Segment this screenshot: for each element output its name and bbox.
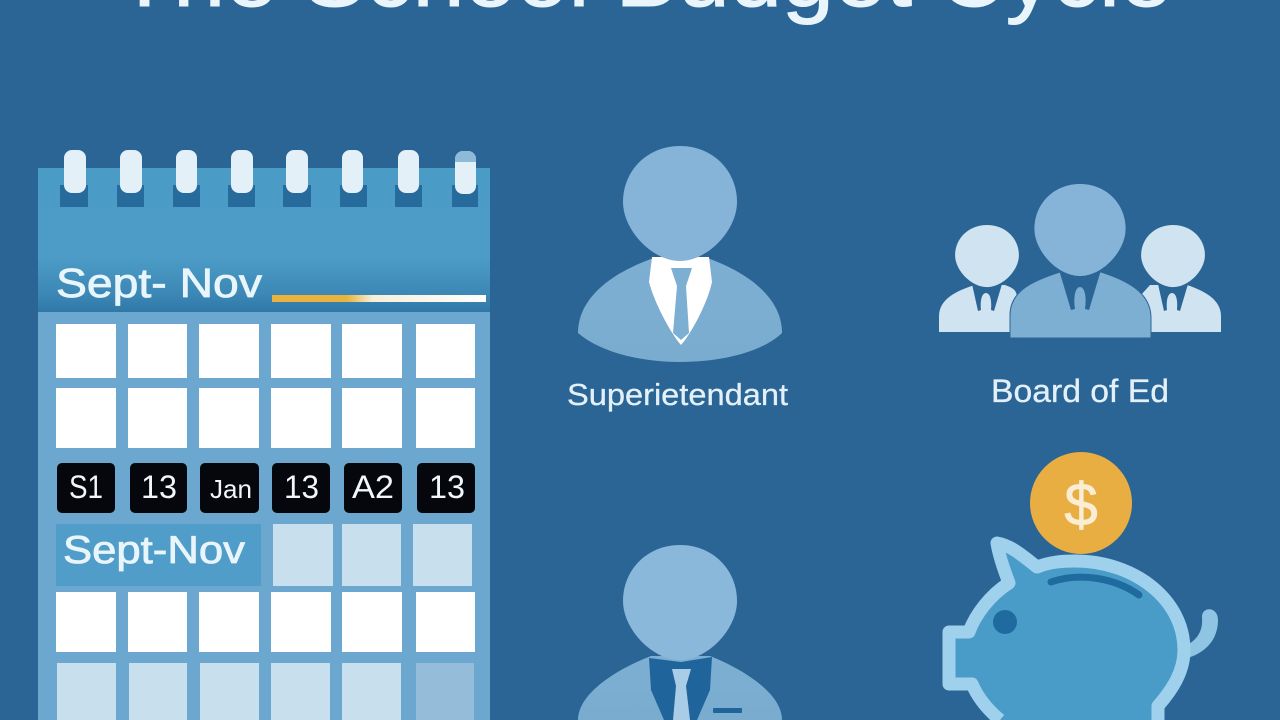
icon: second staff member xyxy=(578,545,782,720)
yellow progress rule xyxy=(272,295,486,302)
calendar body xyxy=(38,312,490,720)
highlighted period: Sept-Nov xyxy=(56,524,261,586)
icon: coin: $ xyxy=(1064,471,1098,538)
icon: piggy bank xyxy=(949,543,1218,720)
label: superintendant: Superietendant xyxy=(567,377,788,412)
pale date cells xyxy=(273,524,472,586)
black date chips: A2 xyxy=(352,469,394,505)
black date chips: S1 xyxy=(69,469,103,505)
highlighted period: Sept-Nov: Sept-Nov xyxy=(63,529,246,572)
black date chips: 13 xyxy=(429,469,465,505)
side member right xyxy=(1141,225,1221,332)
centre member xyxy=(1010,184,1151,338)
pig outline xyxy=(949,543,1184,720)
side member left xyxy=(939,225,1019,332)
pig body fill xyxy=(949,543,1184,720)
black date chips xyxy=(57,463,475,513)
tail xyxy=(1180,609,1218,660)
coin slot xyxy=(1051,577,1139,595)
label: board of ed: Board of Ed xyxy=(991,373,1169,409)
black date chips: Jan xyxy=(210,474,252,504)
month label: Sept- Nov: Sept- Nov xyxy=(56,260,263,306)
icon: coin xyxy=(1030,452,1132,554)
black date chips: 13 xyxy=(141,469,177,505)
black date chips: 13 xyxy=(284,469,319,505)
pale date cells bottom xyxy=(57,663,474,720)
white date cells lower xyxy=(56,592,475,652)
panel: calendar xyxy=(38,150,490,720)
calendar header band xyxy=(38,168,490,312)
eye xyxy=(993,610,1017,634)
white date cells xyxy=(56,324,475,448)
icon: superintendent xyxy=(578,146,782,362)
icon: board of education xyxy=(939,184,1221,338)
binding rings xyxy=(60,150,478,207)
